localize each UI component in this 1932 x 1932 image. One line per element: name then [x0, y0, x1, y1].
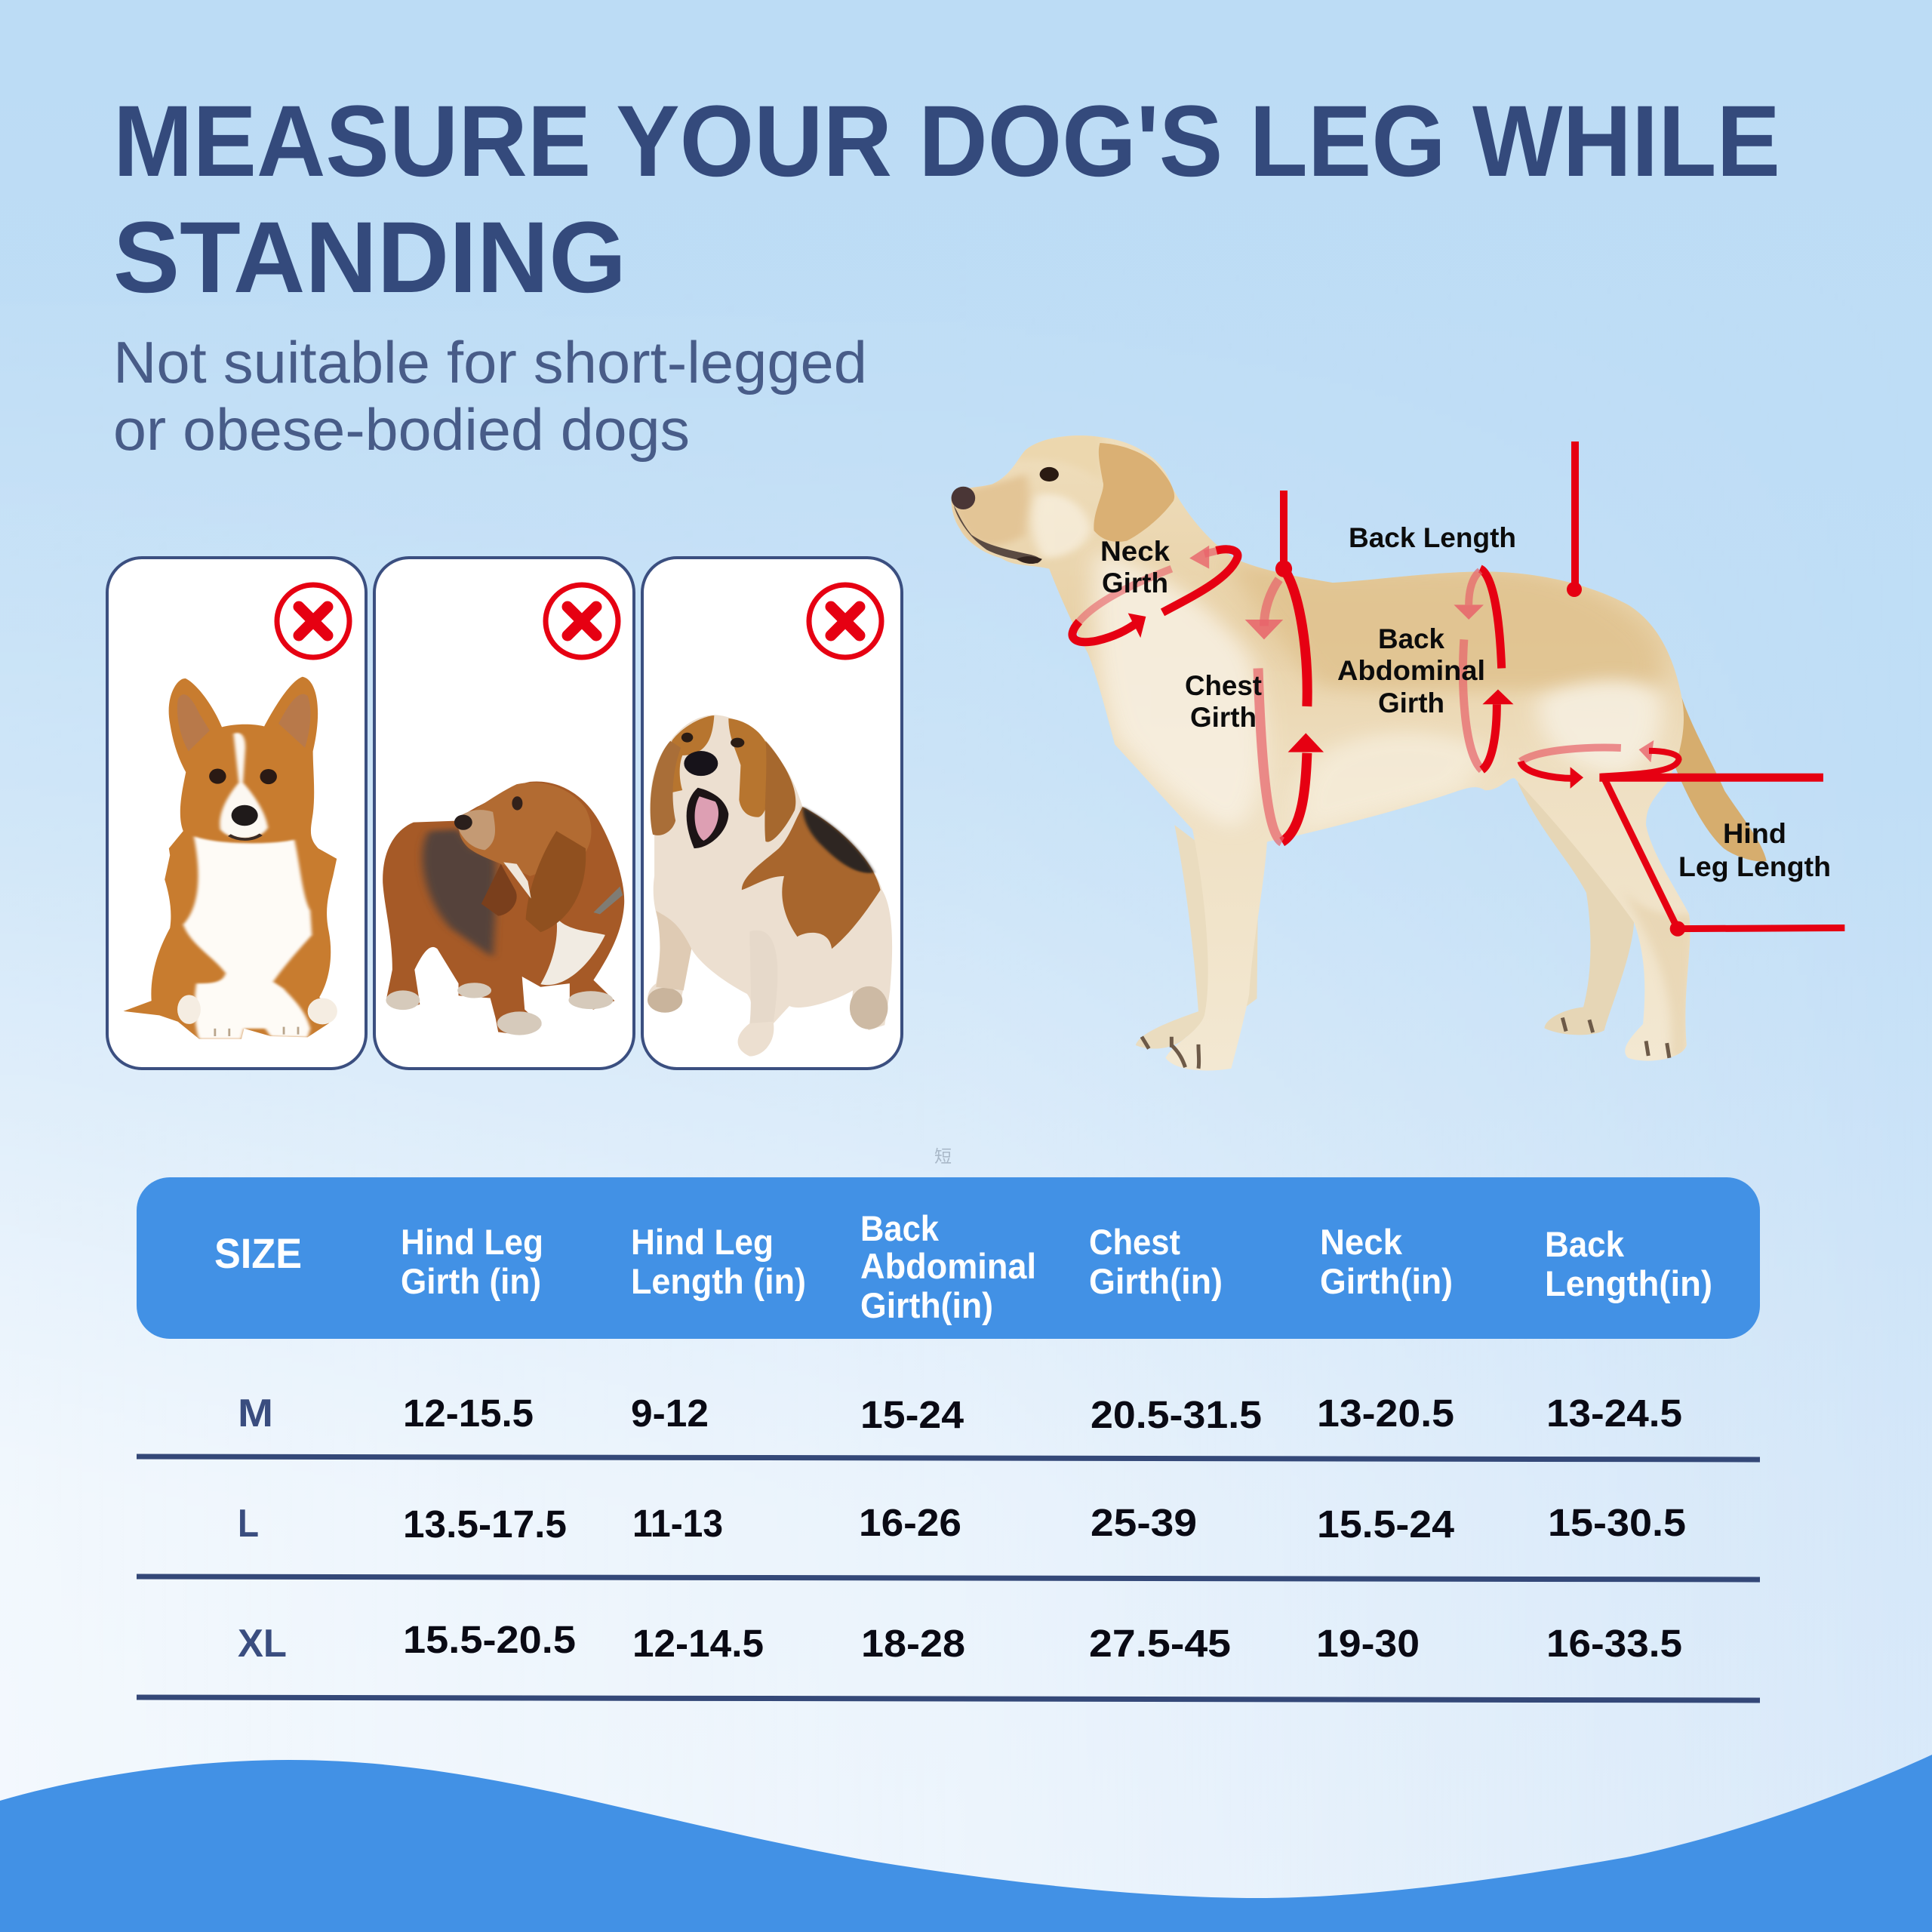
subtitle: or obese-bodied dogs	[113, 396, 690, 463]
row L: 13.5-17.5	[403, 1503, 567, 1546]
table header: Chest	[1089, 1222, 1180, 1262]
measurement: back abdominal girth	[1454, 569, 1513, 770]
row XL: 12-14.5	[632, 1622, 764, 1665]
icon: red cross	[809, 585, 881, 657]
measurement: hind leg girth and length	[1521, 740, 1844, 937]
row XL: XL	[238, 1622, 287, 1666]
table header: Length(in)	[1545, 1263, 1712, 1303]
size table	[137, 1177, 1760, 1700]
label: neck girth: Neck	[1100, 536, 1170, 567]
table header: Girth(in)	[1089, 1261, 1223, 1301]
row M: 15-24	[860, 1393, 964, 1436]
row L: 16-26	[859, 1501, 961, 1544]
table header: Hind Leg	[631, 1222, 774, 1262]
row XL: 16-33.5	[1546, 1622, 1682, 1665]
table header: Length (in)	[631, 1261, 806, 1301]
row XL	[238, 1618, 1682, 1666]
table header: Abdominal	[860, 1246, 1036, 1286]
row M: 20.5-31.5	[1091, 1393, 1262, 1436]
row M: 13-20.5	[1317, 1392, 1454, 1435]
corgi illustration	[123, 677, 337, 1039]
row XL: 15.5-20.5	[403, 1618, 576, 1661]
measurement: back length	[1284, 441, 1582, 597]
label: back abdominal girth: Back	[1378, 623, 1444, 654]
panel: unsuitable dog 3, overweight beagle	[642, 558, 902, 1069]
row XL: 19-30	[1316, 1622, 1420, 1665]
title: STANDING	[113, 202, 626, 314]
panel: unsuitable dog 2, basset hound	[374, 558, 634, 1069]
row L	[238, 1501, 1686, 1546]
row L: L	[238, 1502, 259, 1546]
row L: 15-30.5	[1548, 1501, 1686, 1544]
measurement: neck girth	[1072, 546, 1238, 642]
table header: Back	[860, 1208, 940, 1248]
card frame	[374, 558, 634, 1069]
subtitle	[113, 329, 867, 463]
row M: 12-15.5	[403, 1392, 534, 1435]
label: hind leg length: Hind	[1723, 818, 1786, 849]
row M: 9-12	[631, 1392, 709, 1435]
labrador illustration	[951, 431, 1767, 1070]
label: neck girth: Girth	[1102, 568, 1168, 598]
bottom wave	[0, 1755, 1932, 1932]
measurement: chest girth	[1245, 560, 1324, 842]
table header: Girth(in)	[1320, 1261, 1453, 1301]
panel: measuring diagram	[951, 431, 1844, 1070]
beagle illustration	[648, 715, 892, 1057]
label: chest girth: Girth	[1190, 702, 1257, 733]
table header: Neck	[1320, 1222, 1403, 1262]
label: chest girth	[1185, 670, 1262, 733]
table header: Girth(in)	[860, 1285, 993, 1325]
row XL: 18-28	[861, 1622, 965, 1665]
title	[113, 85, 1780, 314]
row L: 15.5-24	[1317, 1503, 1455, 1546]
subtitle: Not suitable for short-legged	[113, 329, 867, 395]
table header: Back	[1545, 1224, 1625, 1264]
label: back abdominal girth: Girth	[1378, 688, 1444, 718]
basset hound illustration	[383, 781, 624, 1035]
row M	[238, 1392, 1682, 1436]
table header	[137, 1177, 1760, 1339]
table header: Hind Leg	[401, 1222, 543, 1262]
label: chest girth: Chest	[1185, 670, 1262, 701]
label: back length: Back Length	[1349, 522, 1516, 553]
row L: 11-13	[632, 1502, 723, 1545]
panel: unsuitable dog 1, corgi	[107, 558, 366, 1069]
label: neck girth	[1100, 536, 1170, 598]
table header: SIZE	[214, 1229, 302, 1277]
small artefact glyph: 短	[934, 1146, 952, 1166]
table header: Girth (in)	[401, 1261, 541, 1301]
icon: red cross	[277, 585, 349, 657]
row XL: 27.5-45	[1089, 1622, 1231, 1665]
row M: M	[238, 1392, 273, 1435]
row L: 25-39	[1091, 1501, 1197, 1544]
card frame	[642, 558, 902, 1069]
label: back abdominal girth: Abdominal	[1337, 655, 1485, 686]
icon: red cross	[546, 585, 618, 657]
row M: 13-24.5	[1546, 1392, 1682, 1435]
card frame	[107, 558, 366, 1069]
label: back abdominal girth	[1337, 623, 1485, 718]
title: MEASURE YOUR DOG'S LEG WHILE	[113, 85, 1780, 198]
label: hind leg length	[1678, 818, 1831, 882]
label: hind leg length: Leg Length	[1678, 851, 1831, 882]
